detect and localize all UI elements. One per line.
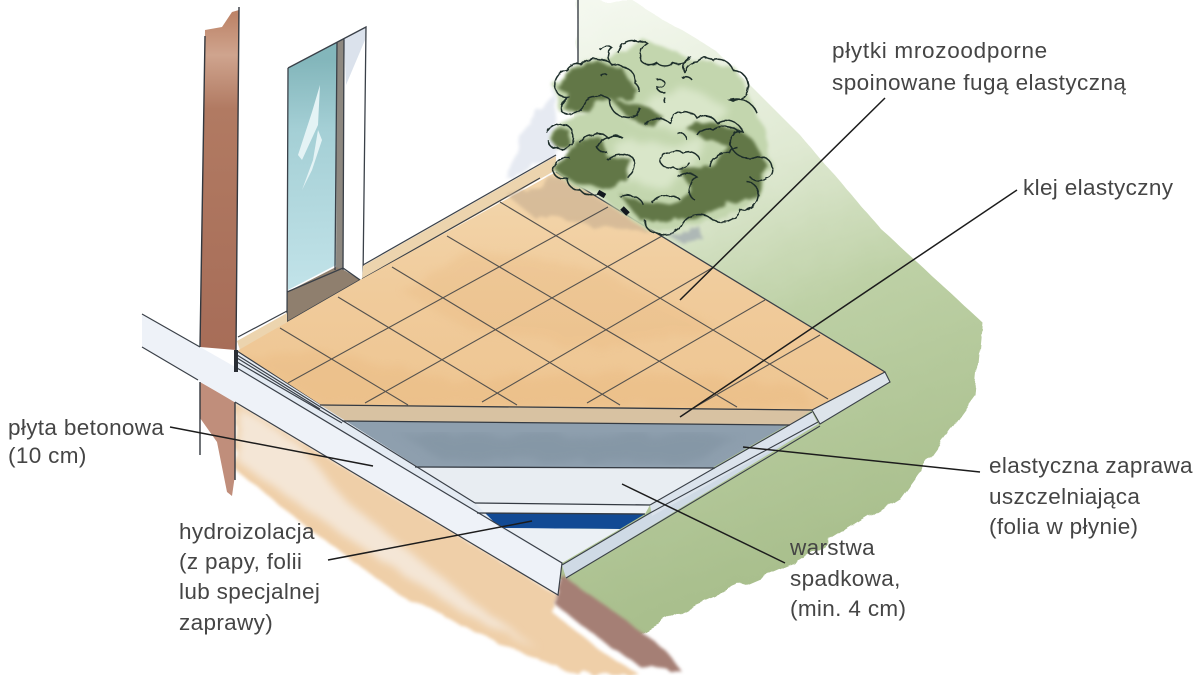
leader: plyta [170, 427, 373, 466]
door glass [288, 42, 337, 290]
label: hydroizolacja: zaprawy) [179, 610, 273, 635]
layer: waterproofing mortar [342, 421, 787, 468]
layer: concrete slab [500, 528, 620, 563]
lawn [560, 0, 982, 642]
label: elastyczna zaprawa: uszczelniająca [989, 484, 1140, 509]
label: elastyczna zaprawa: elastyczna zaprawa [989, 453, 1193, 478]
label: hydroizolacja: hydroizolacja [179, 519, 315, 544]
right edge end block [812, 372, 890, 424]
leader: hydroizolacja [328, 521, 532, 560]
label: warstwa spadkowa: spadkowa, [790, 566, 901, 591]
layer: sloping screed [415, 467, 715, 505]
leader: plytki [680, 98, 885, 300]
vertical corner line of house wall [577, 0, 579, 63]
bush pale base [547, 40, 773, 230]
brown soil at corner [555, 574, 682, 672]
leader: warstwa [622, 484, 785, 563]
leader: zaprawa [743, 447, 980, 472]
label: płyta betonowa: (10 cm) [8, 443, 87, 468]
grey patch under bush [668, 225, 702, 244]
tile grout lines [280, 202, 828, 410]
icon: bush [547, 40, 773, 244]
bush outline strokes [547, 41, 773, 235]
label: klej elastyczny: klej elastyczny [1023, 175, 1174, 200]
leader lines [170, 98, 1017, 563]
door reveal [344, 27, 366, 85]
label: hydroizolacja: (z papy, folii [179, 549, 302, 574]
pale wash on foundation [237, 405, 540, 650]
layer: lower screed strip [475, 503, 650, 514]
label: warstwa spadkowa: warstwa [790, 535, 875, 560]
label: warstwa spadkowa: (min. 4 cm) [790, 596, 906, 621]
label: płytki mrozoodporne: spoinowane fugą elastyczną [832, 70, 1126, 95]
bush ground shadow [598, 192, 628, 214]
layer: adhesive [320, 405, 812, 425]
label: hydroizolacja: lub specjalnej [179, 579, 320, 604]
slab front band [142, 314, 562, 595]
label: płytki mrozoodporne: płytki mrozoodporne [832, 38, 1048, 63]
pale blue shadow behind bush [507, 90, 557, 180]
bush dark foliage [549, 62, 768, 222]
foundation soil [235, 402, 640, 675]
door [287, 27, 366, 322]
layer outlines [320, 405, 812, 514]
panel: tile surface [237, 172, 885, 410]
label: elastyczna zaprawa: (folia w płynie) [989, 514, 1138, 539]
layer: waterproofing [477, 513, 645, 529]
brick wall section [200, 7, 239, 496]
door glass reflection [298, 85, 322, 190]
bush light foliage [610, 85, 730, 190]
door sill [287, 267, 360, 322]
label: płyta betonowa: płyta betonowa [8, 415, 164, 440]
door frame [336, 38, 344, 270]
tile shading patches [510, 175, 650, 232]
right edge strip [562, 412, 820, 578]
skirting [237, 155, 556, 350]
leader: klej [680, 190, 1017, 417]
